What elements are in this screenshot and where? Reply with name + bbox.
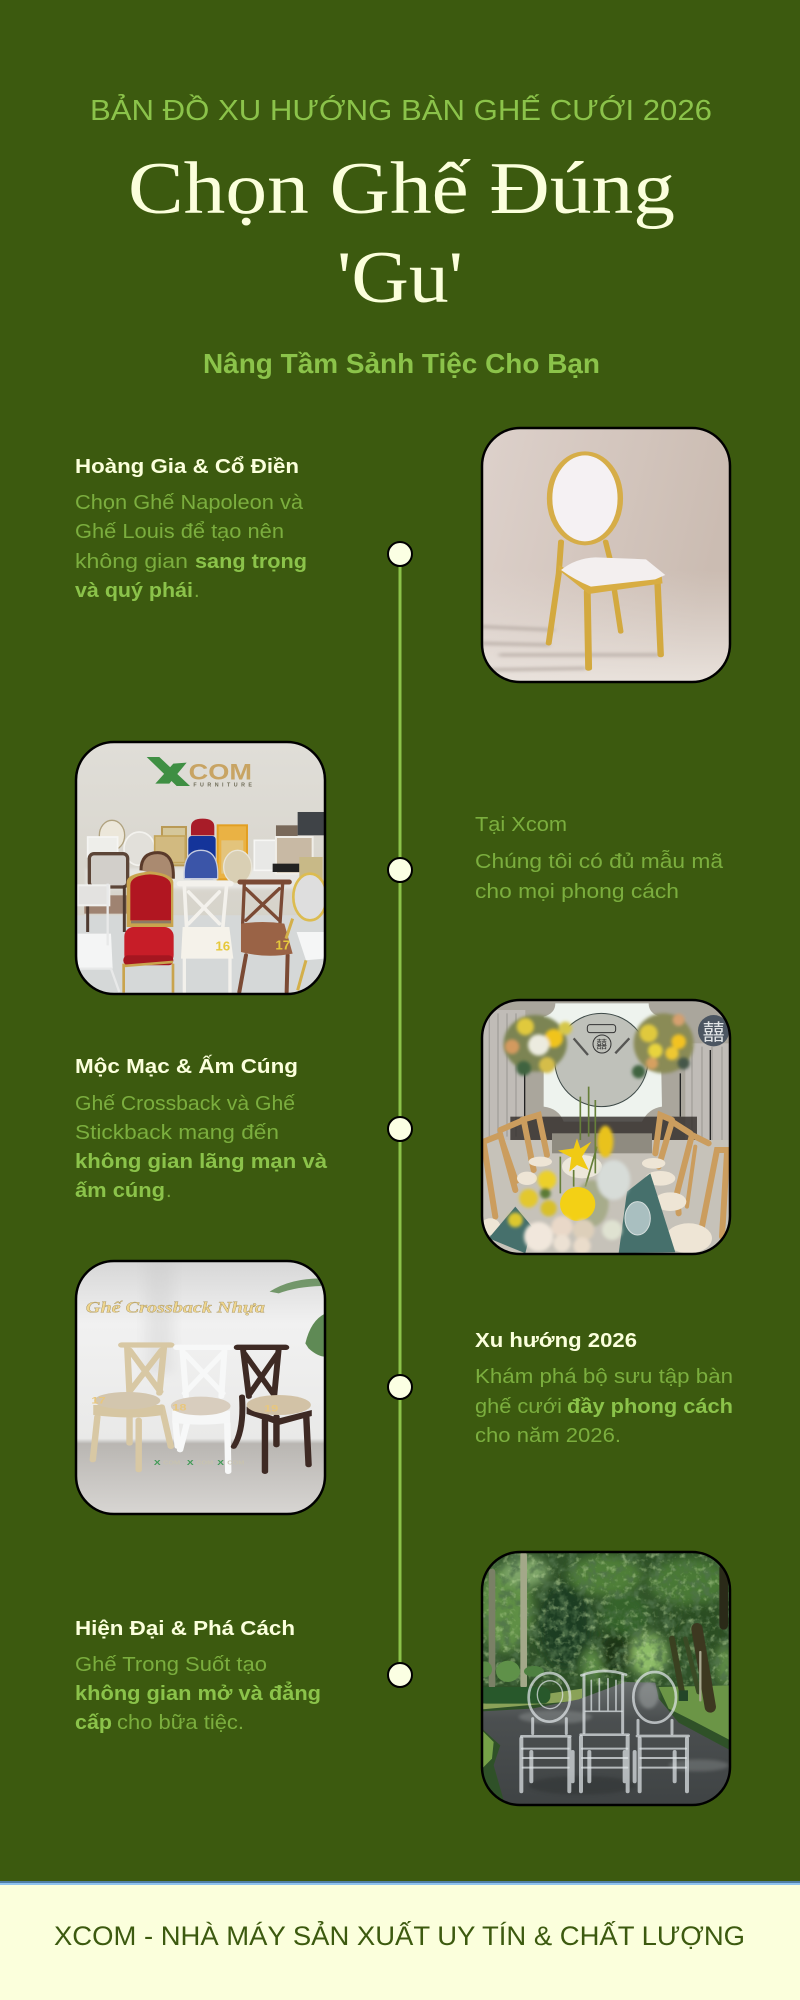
table cloth and runner <box>562 1155 602 1178</box>
palm leaves <box>270 1278 326 1357</box>
heading: Mộc Mạc & Ấm Cúng <box>75 1055 298 1078</box>
description: Chọn Ghế Napoleon và <box>75 492 304 514</box>
wooden chairs left <box>484 1115 547 1217</box>
text block: Tại Xcom <box>475 814 724 903</box>
photo border <box>76 742 325 994</box>
table flowers <box>560 1087 597 1193</box>
logo <box>147 757 252 789</box>
description: đầy phong cách <box>567 1396 733 1418</box>
floor logos: X <box>217 1458 224 1467</box>
clear chair centre <box>581 1671 629 1791</box>
floor logos <box>154 1460 244 1465</box>
description: không gian <box>75 551 188 573</box>
heading: Hoàng Gia & Cổ Điền <box>75 456 299 478</box>
description: không gian mở và đẳng <box>75 1681 321 1705</box>
text block: Hiện Đại & Phá Cách <box>75 1618 321 1734</box>
clear chair right <box>633 1672 689 1791</box>
subtitle: Nâng Tầm Sảnh Tiệc Cho Bạn <box>203 348 600 379</box>
footer text: XCOM - NHÀ MÁY SẢN XUẤT UY TÍN & CHẤT LƯỢNG <box>54 1919 745 1951</box>
tree trunks <box>492 1555 724 1707</box>
photo: transparent chairs in park <box>477 1552 735 1806</box>
photo border <box>482 1000 730 1254</box>
logo: FURNITURE <box>193 783 252 789</box>
photo: Xcom showroom chairs <box>76 742 327 996</box>
heading: Tại Xcom <box>475 814 567 836</box>
photo: wedding banquet table <box>480 1000 732 1256</box>
dark chair <box>234 1347 309 1472</box>
header <box>90 93 712 379</box>
timeline <box>388 542 412 1687</box>
photo: wedding banquet table: 囍 <box>596 1037 607 1052</box>
text block: Mộc Mạc & Ấm Cúng <box>75 1055 328 1202</box>
gold oval chair <box>293 874 327 920</box>
chair numbers <box>92 1397 278 1412</box>
footer band <box>0 1881 800 2000</box>
double-happiness badge: 囍 <box>703 1015 725 1047</box>
photo border <box>482 1552 730 1805</box>
description: không gian lãng mạn và <box>75 1151 328 1173</box>
photo border <box>76 1261 325 1514</box>
timeline node 2 <box>388 858 412 882</box>
brown cross chair <box>239 882 289 992</box>
eyebrow title: BẢN ĐỒ XU HƯỚNG BÀN GHẾ CƯỚI 2026 <box>90 93 712 127</box>
description: ghế cưới <box>475 1396 562 1418</box>
photo: Xcom showroom chairs: 17 <box>275 938 290 953</box>
beige chair <box>93 1345 171 1470</box>
timeline node 4 <box>388 1375 412 1399</box>
chair numbers: 16 <box>215 938 230 953</box>
floor logos: COM <box>163 1460 180 1466</box>
timeline node 3 <box>388 1117 412 1141</box>
text block: Hoàng Gia & Cổ Điền <box>75 456 307 602</box>
chair numbers: 17 <box>91 1396 106 1406</box>
description: Ghế Trong Suốt tạo <box>75 1654 267 1676</box>
red chair <box>123 871 174 993</box>
photo: plastic crossback chairs <box>76 1260 326 1515</box>
timeline node 1 <box>388 542 412 566</box>
main title <box>128 148 675 319</box>
heading: Hiện Đại & Phá Cách <box>75 1618 295 1640</box>
description: cho năm 2026. <box>475 1425 621 1447</box>
description: ấm cúng <box>75 1180 165 1202</box>
timeline line <box>398 560 402 1670</box>
chair numbers: 18 <box>172 1403 187 1413</box>
lawn and bushes <box>482 1685 730 1769</box>
floor logos: X <box>154 1458 161 1467</box>
heading: Xu hướng 2026 <box>475 1330 637 1352</box>
foliage texture <box>482 1552 732 1685</box>
floor logos: COM <box>196 1460 213 1466</box>
description: cho bữa tiệc. <box>117 1712 244 1734</box>
floor logos: X <box>187 1458 194 1467</box>
main title: Chọn Ghế Đúng <box>128 148 675 230</box>
description: cho mọi phong cách <box>475 881 679 903</box>
photo border <box>482 428 730 682</box>
main title: 'Gu' <box>337 237 463 319</box>
description <box>75 1654 321 1734</box>
chair caption: Ghế Crossback Nhựa <box>86 1299 265 1317</box>
logo: COM <box>189 759 252 784</box>
white cross chair <box>179 884 231 992</box>
description: Khám phá bộ sưu tập bàn <box>475 1366 733 1388</box>
wooden chairs right <box>655 1115 730 1237</box>
floor logos: COM <box>227 1460 244 1466</box>
description: . <box>166 1180 172 1202</box>
description <box>75 492 307 602</box>
road <box>482 1682 730 1806</box>
description: Stickback mang đến <box>75 1122 279 1144</box>
description <box>475 850 724 903</box>
photo: gold Napoleon chair <box>481 428 730 682</box>
description: . <box>194 580 200 602</box>
clear chair left <box>521 1673 573 1791</box>
description: cấp <box>75 1712 112 1734</box>
description <box>475 1366 733 1447</box>
text block: Xu hướng 2026 <box>475 1330 733 1447</box>
timeline node 5 <box>388 1663 412 1687</box>
vase <box>625 1202 650 1235</box>
right floral <box>632 1013 694 1078</box>
description: Chúng tôi có đủ mẫu mã <box>475 850 724 873</box>
description: sang trọng <box>195 551 307 573</box>
backdrop arch <box>544 1003 662 1122</box>
description: và quý phái <box>75 580 193 602</box>
description: Ghế Crossback và Ghế <box>75 1093 295 1115</box>
chair numbers: 19 <box>264 1404 278 1414</box>
white chair <box>175 1347 231 1472</box>
description <box>75 1093 328 1202</box>
description: Ghế Louis để tạo nên <box>75 521 284 543</box>
left floral <box>504 1015 572 1076</box>
bushes <box>477 1661 688 1704</box>
